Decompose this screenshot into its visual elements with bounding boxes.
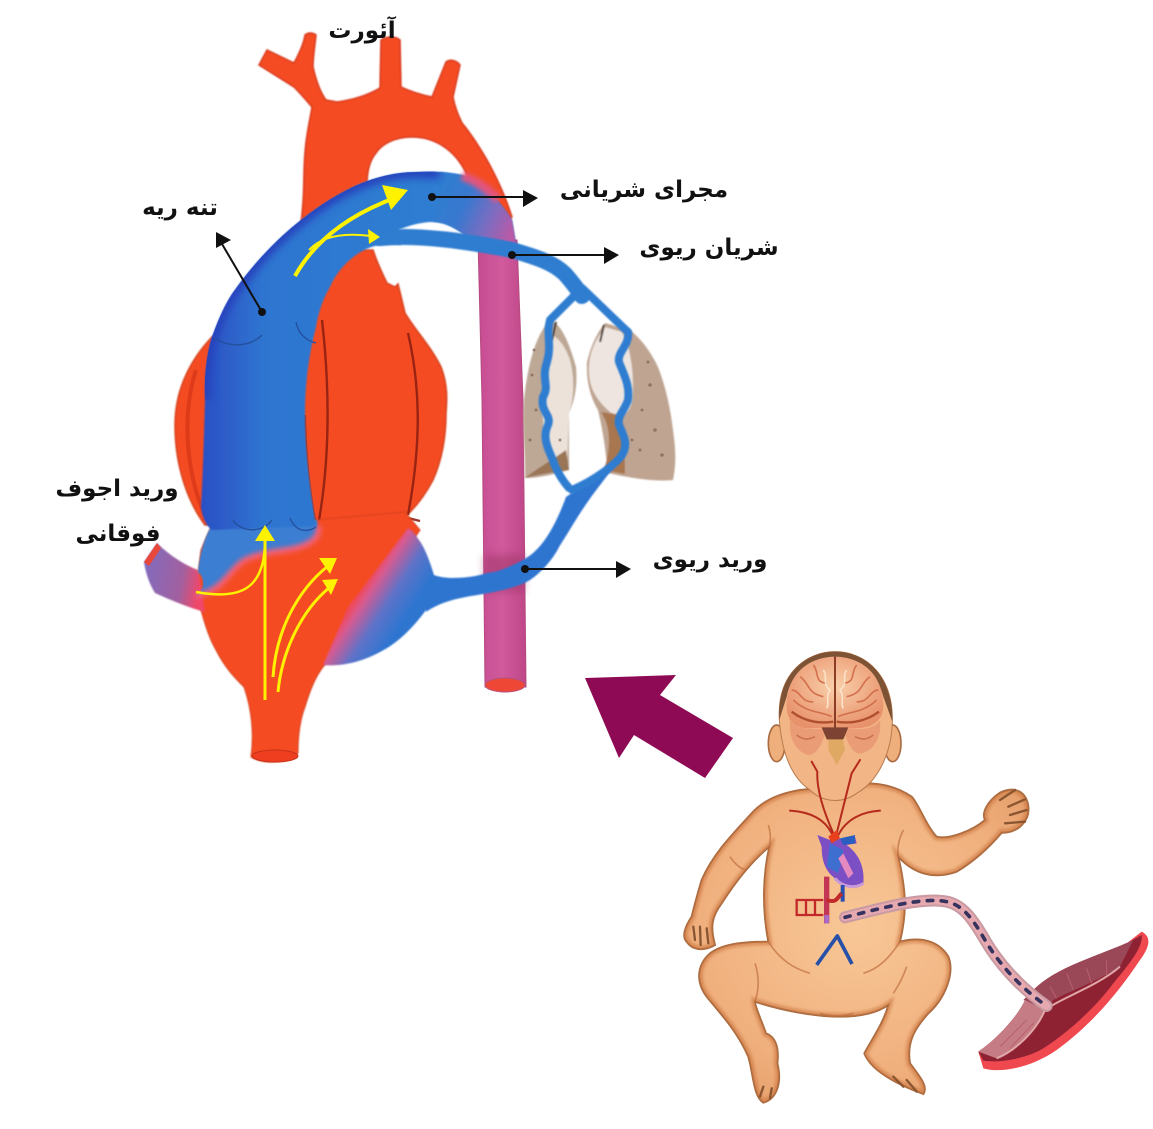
label: pulmonary artery: شریان ریوی <box>639 235 779 261</box>
heart chambers upper body <box>175 250 447 525</box>
blue left atrium blob and pulmonary vein <box>323 460 619 665</box>
label: superior vena cava: فوقانی <box>75 521 161 547</box>
pointer: pulmonary artery <box>508 247 619 264</box>
pointer: arterial duct <box>428 190 538 207</box>
pulmonary trunk and arterial duct <box>201 172 517 530</box>
large purple arrow <box>585 675 733 778</box>
pink blend edge on atria <box>196 526 318 596</box>
pointer: pulmonary vein <box>521 561 631 578</box>
heart wall shading lines <box>187 320 420 530</box>
label: superior vena cava <box>55 476 179 547</box>
pointer: pulmonary trunk <box>216 232 266 316</box>
icon: liver vessels <box>797 877 843 923</box>
bottom vessel opening <box>252 750 298 762</box>
icon: baby body <box>684 783 1028 1103</box>
superior vena cava stub <box>144 543 205 612</box>
icon: brain <box>787 657 883 765</box>
aorta arch with branches <box>259 33 512 240</box>
pulmonary arteries and lung vessels <box>380 237 628 490</box>
heart and great vessels diagram <box>144 33 675 762</box>
label: arterial duct: مجرای شریانی <box>560 177 728 203</box>
right atrium blue region <box>196 520 318 596</box>
yellow flow arrows <box>196 185 408 700</box>
label: pulmonary vein: ورید ریوی <box>653 547 767 573</box>
label: pulmonary trunk: تنه ریه <box>142 195 218 221</box>
icon: baby head <box>768 652 901 800</box>
lung speckle texture <box>528 348 664 457</box>
label: aorta: آئورت <box>328 15 397 44</box>
label: superior vena cava: ورید اجوف <box>55 476 179 502</box>
icon: body creases <box>730 825 907 1016</box>
icon: umbilical cord <box>845 900 1047 1006</box>
icon: arteries <box>790 760 880 835</box>
icon: heart <box>817 830 864 887</box>
lower heart and inferior vessel <box>198 512 420 762</box>
descending aorta <box>478 240 526 692</box>
icon: hand fingers <box>693 790 1027 1098</box>
lungs <box>523 320 675 481</box>
icon: iliac veins <box>817 936 852 965</box>
baby illustration with placenta <box>684 652 1148 1103</box>
icon: placenta <box>978 932 1148 1070</box>
